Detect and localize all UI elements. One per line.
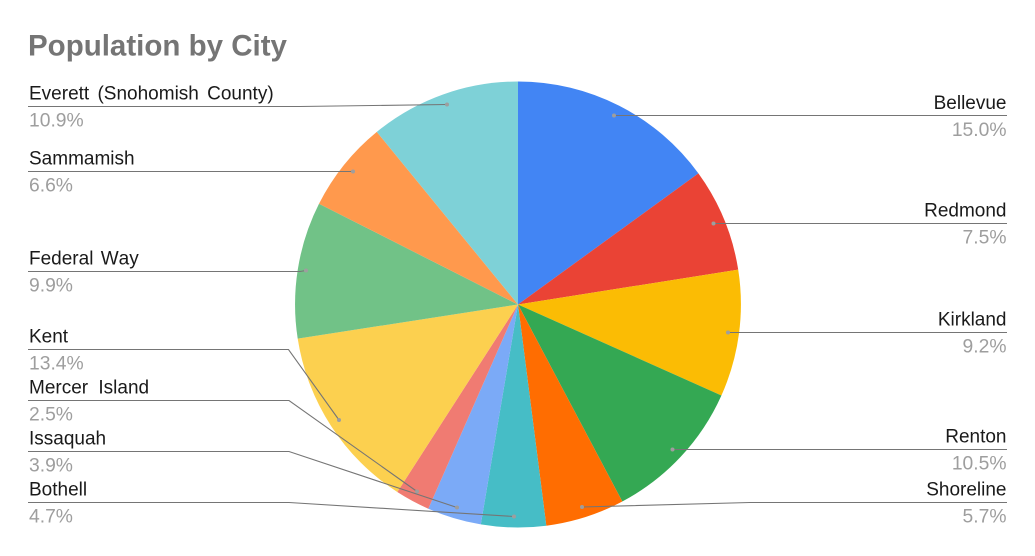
label: Everett <box>28 84 449 132</box>
slice: Shoreline <box>518 304 622 526</box>
label: Redmond: Redmond <box>924 200 1006 222</box>
label: Kent: Kent <box>29 326 69 348</box>
slice: Bothell <box>481 304 546 528</box>
label: Shoreline: 5.7% <box>963 506 1006 528</box>
label: Kirkland <box>726 310 1007 358</box>
slice: Bellevue <box>518 82 698 304</box>
label: Kirkland: 9.2% <box>963 336 1006 358</box>
label: Issaquah: 3.9% <box>29 456 73 476</box>
label: Renton: 10.5% <box>952 454 1006 474</box>
label: Mercer Island: Mercer Island <box>29 378 149 398</box>
slice: Kirkland <box>518 270 741 396</box>
slice: Issaquah <box>428 304 518 524</box>
label: Bellevue <box>612 93 1007 141</box>
label: Bellevue: Bellevue <box>934 93 1006 114</box>
slice: Renton <box>518 304 721 502</box>
label: Bothell: Bothell <box>29 480 87 500</box>
label: Issaquah <box>28 428 459 510</box>
label: Kent <box>28 326 341 422</box>
label: Kent: 13.4% <box>29 354 84 374</box>
label: Renton <box>670 426 1007 474</box>
label: Bellevue: 15.0% <box>952 120 1006 141</box>
label: Mercer Island <box>28 378 419 494</box>
label: Sammamish: Sammamish <box>29 148 135 170</box>
label: Issaquah: Issaquah <box>29 428 106 450</box>
label: Everett: Everett (Snohomish County) <box>29 84 274 104</box>
pie chart <box>295 82 741 528</box>
label: Redmond <box>712 200 1007 248</box>
label: Sammamish <box>28 148 355 196</box>
label: Kirkland: Kirkland <box>938 310 1006 330</box>
slice: Mercer Island <box>397 304 518 509</box>
label: Everett: 10.9% <box>29 110 84 132</box>
label: Shoreline: Shoreline <box>926 480 1006 500</box>
label: Federal Way: Federal Way <box>29 248 139 270</box>
slice: Federal Way <box>295 204 518 339</box>
label: Renton: Renton <box>945 426 1006 448</box>
label: Redmond: 7.5% <box>963 228 1006 248</box>
slice: Everett <box>377 82 518 304</box>
label: Federal Way <box>28 248 308 296</box>
title: Population by City <box>28 30 288 62</box>
label: Bothell <box>28 480 516 528</box>
slice: Sammamish <box>319 132 518 304</box>
label: Sammamish: 6.6% <box>29 176 73 196</box>
label: Mercer Island: 2.5% <box>29 404 73 426</box>
label: Shoreline <box>580 480 1007 528</box>
label: Federal Way: 9.9% <box>29 276 73 296</box>
slice: Redmond <box>518 173 738 304</box>
label: Bothell: 4.7% <box>29 506 73 528</box>
slice: Kent <box>298 304 518 492</box>
